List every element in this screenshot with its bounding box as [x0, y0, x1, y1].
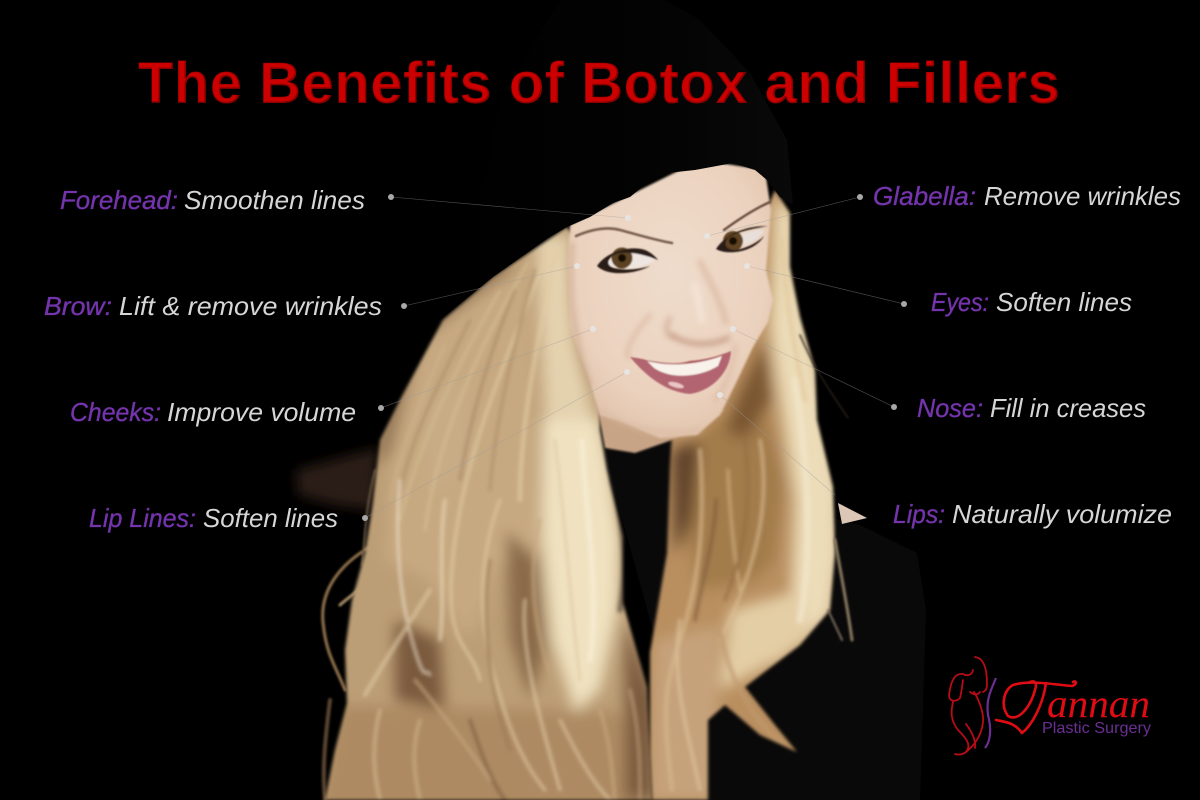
- callout: nose: [730, 326, 1146, 423]
- eye: left: [597, 248, 658, 273]
- callout: glabella: Glabella:: [873, 181, 976, 211]
- callout: nose: Nose:: [917, 393, 983, 423]
- title: The Benefits of Botox and Fillers: [138, 51, 1060, 116]
- eyebrows: [576, 202, 770, 243]
- callout: lips: [717, 392, 1172, 529]
- callout: brow: Lift & remove wrinkles: [119, 291, 382, 321]
- neck: [597, 405, 725, 453]
- left hair mass: [320, 220, 660, 800]
- callout: eyes: [744, 263, 1132, 317]
- icon: body outline: [949, 657, 987, 755]
- callout: lip lines: Lip Lines:: [89, 503, 196, 533]
- face: [568, 160, 773, 438]
- right hair mass: [645, 180, 845, 800]
- shoulder highlight: [838, 503, 867, 524]
- photo: woman with hat and long blonde hair: [296, 0, 926, 800]
- callout: eyes: Eyes:: [931, 287, 989, 317]
- callout: lip lines: Soften lines: [203, 503, 338, 533]
- callout: brow: [44, 263, 580, 321]
- callout: lips: Lips:: [893, 499, 945, 529]
- face shading: [571, 245, 735, 433]
- icon: T flourish: [996, 681, 1076, 733]
- callout: cheeks: [70, 326, 596, 427]
- callout: forehead: [60, 185, 631, 221]
- brand name: annan: [1047, 681, 1150, 726]
- callout: nose: Fill in creases: [990, 393, 1146, 423]
- callout: glabella: [704, 181, 1181, 239]
- logo: Tannan Plastic Surgery: [949, 657, 1151, 755]
- mouth: [630, 351, 731, 394]
- hat: [440, 0, 793, 320]
- callout: cheeks: Cheeks:: [70, 397, 161, 427]
- callout: lips: Naturally volumize: [952, 499, 1172, 529]
- left hair wisps: [323, 470, 375, 800]
- callout: eyes: Soften lines: [996, 287, 1132, 317]
- sweater: [603, 440, 926, 800]
- callout: lip lines: [89, 369, 630, 533]
- tagline: Plastic Surgery: [1042, 720, 1151, 737]
- icon: purple curve: [985, 678, 996, 748]
- callout: forehead: Smoothen lines: [184, 185, 365, 215]
- callout: cheeks: Improve volume: [167, 397, 356, 427]
- callout: brow: Brow:: [44, 291, 112, 321]
- callout: forehead: Forehead:: [60, 185, 178, 215]
- eye: right: [716, 226, 768, 252]
- brown back hair wisps: [296, 448, 378, 510]
- right hair fringe wisps: [800, 335, 852, 640]
- callout: glabella: Remove wrinkles: [984, 181, 1181, 211]
